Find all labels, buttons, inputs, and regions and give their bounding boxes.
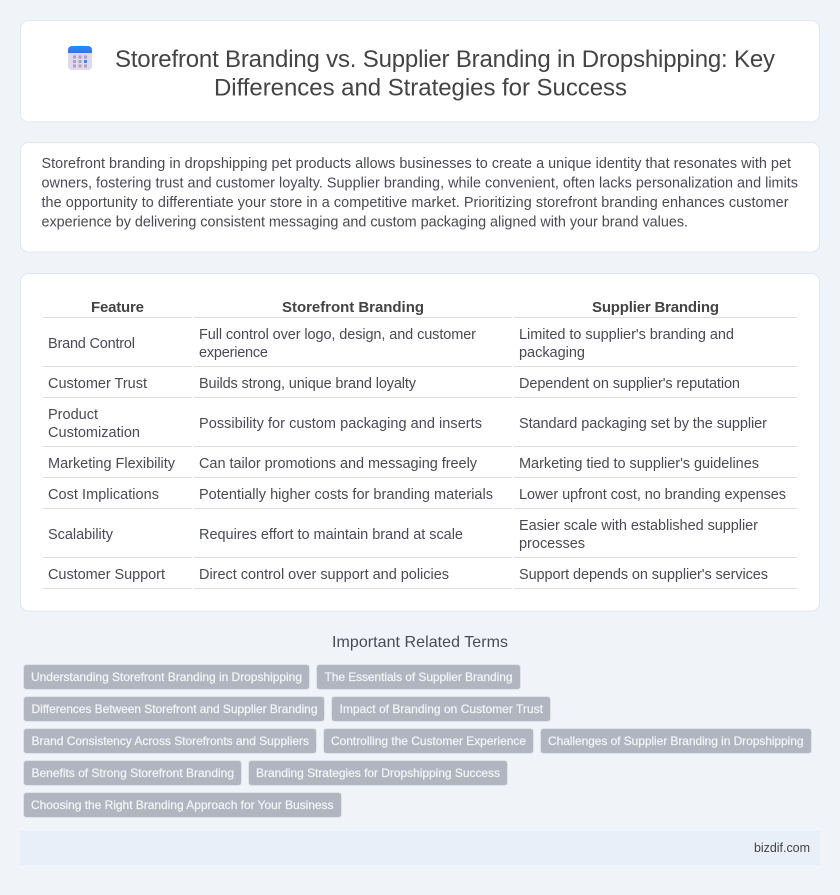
row: customer trust: Dependent on supplier's reputation	[519, 376, 740, 392]
table header row: Storefront Branding	[282, 299, 424, 316]
row: marketing flexibility: Can tailor promotions and messaging freely	[199, 456, 478, 472]
row: cost implications	[48, 487, 786, 503]
footer	[20, 831, 820, 865]
row: brand control: experience	[199, 345, 268, 361]
row: customer trust: Builds strong, unique brand loyalty	[199, 376, 417, 392]
row: product customization: Standard packaging set by the supplier	[519, 416, 767, 432]
table header row	[91, 299, 719, 316]
table header row: Supplier Branding	[592, 299, 719, 316]
intro text: the opportunity to differentiate your store in a competitive market. Prioritizing storefront branding enhances customer	[42, 195, 789, 211]
row: marketing flexibility: Marketing Flexibility	[48, 456, 176, 472]
tag	[248, 760, 508, 786]
row: brand control: packaging	[519, 345, 585, 361]
row: customer support	[48, 567, 768, 583]
tag	[24, 696, 324, 722]
tag: Brand Consistency Across Storefronts and Suppliers	[32, 734, 309, 748]
tag	[332, 696, 550, 722]
row: scalability	[48, 518, 758, 552]
title: Storefront Branding vs. Supplier Branding in Dropshipping: Key	[115, 46, 775, 73]
tag: Branding Strategies for Dropshipping Success	[256, 766, 500, 780]
row: scalability: Scalability	[48, 527, 114, 543]
row: brand control	[48, 327, 734, 361]
icon: calendar	[68, 46, 92, 70]
intro text	[42, 156, 798, 230]
row: scalability: processes	[519, 536, 585, 552]
intro text: experience by delivering consistent messaging and custom packaging aligned with your brand values.	[42, 214, 688, 230]
tag	[316, 664, 520, 690]
row: brand control: Brand Control	[48, 336, 135, 352]
tag	[24, 760, 242, 786]
tag	[24, 664, 310, 690]
tag: Understanding Storefront Branding in Dropshipping	[31, 670, 302, 684]
intro text: owners, fostering trust and customer loyalty. Supplier branding, while convenient, often lacks personalization and limits	[42, 176, 798, 192]
row: cost implications: Potentially higher costs for branding materials	[199, 487, 493, 503]
title: Differences and Strategies for Success	[214, 74, 627, 102]
row: cost implications: Cost Implications	[48, 487, 159, 503]
row: scalability: Easier scale with established supplier	[519, 518, 758, 534]
tag: Impact of Branding on Customer Trust	[340, 702, 544, 716]
tag	[24, 728, 316, 754]
tag: Differences Between Storefront and Supplier Branding	[32, 702, 318, 716]
panel: title header	[20, 20, 820, 122]
row: product customization: Product	[48, 407, 98, 423]
row: customer support: Support depends on supplier's services	[519, 567, 768, 583]
row: brand control: Full control over logo, design, and customer	[199, 327, 476, 343]
row: customer trust: Customer Trust	[48, 376, 147, 392]
tag	[324, 728, 534, 754]
tag: Benefits of Strong Storefront Branding	[32, 766, 234, 780]
row: brand control: Limited to supplier's branding and	[519, 327, 734, 343]
row: scalability: Requires effort to maintain brand at scale	[199, 527, 463, 543]
title	[115, 46, 775, 102]
row: customer support: Customer Support	[48, 567, 165, 583]
row: product customization: Customization	[48, 425, 140, 441]
related term tags	[24, 664, 812, 818]
table header row: Feature	[91, 299, 144, 316]
tag: Controlling the Customer Experience	[331, 734, 526, 748]
row: marketing flexibility	[48, 456, 759, 472]
footer site name: bizdif.com	[754, 841, 810, 855]
panel: introduction	[20, 142, 820, 252]
row: customer trust	[48, 376, 740, 392]
row: marketing flexibility: Marketing tied to supplier's guidelines	[519, 456, 759, 472]
heading: related terms: Important Related Terms	[332, 634, 508, 651]
row: customer support: Direct control over support and policies	[199, 567, 449, 583]
tag: Challenges of Supplier Branding in Dropshipping	[548, 734, 804, 748]
panel: comparison table	[20, 274, 820, 611]
intro text: Storefront branding in dropshipping pet products allows businesses to create a unique identity that resonates with pet	[42, 156, 791, 172]
tag: Choosing the Right Branding Approach for Your Business	[31, 798, 334, 812]
tag	[540, 728, 812, 754]
tag: The Essentials of Supplier Branding	[324, 670, 512, 684]
row: product customization	[48, 407, 767, 441]
tag	[24, 792, 342, 818]
row: product customization: Possibility for custom packaging and inserts	[199, 416, 482, 432]
row: cost implications: Lower upfront cost, no branding expenses	[519, 487, 786, 503]
